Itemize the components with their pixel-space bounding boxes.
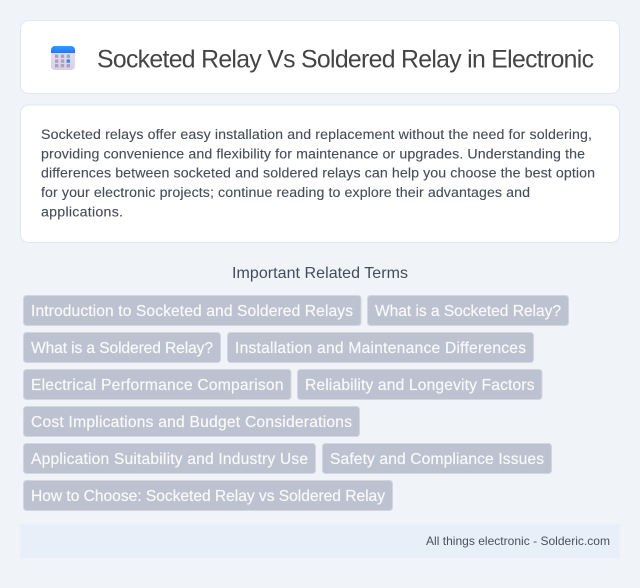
text block: introduction paragraph: Socketed relays offer easy installation and replacement without the need for soldering,: [41, 127, 592, 143]
panel: title card: [20, 20, 620, 94]
text block: introduction paragraph: differences between socketed and soldered relays can help you choose the best option: [41, 166, 595, 182]
chip: what is a soldered relay: [24, 332, 220, 362]
icon: calendar: [51, 46, 75, 70]
text block: introduction paragraph: applications.: [41, 204, 123, 220]
chip: electrical performance: [24, 370, 291, 400]
chip: reliability and longevity: [298, 370, 542, 400]
heading: important related terms: Important Related Terms: [232, 265, 408, 282]
chip: application suitability: Application Suitability and Industry Use: [31, 451, 308, 468]
panel: related terms chips: [24, 296, 568, 510]
chip: how to choose: [24, 480, 392, 510]
chip: cost implications: [24, 406, 360, 436]
text block: introduction paragraph: for your electronic projects; continue reading to explore their advantages and: [41, 185, 530, 201]
footer text: All things electronic - Solderic.com: [426, 534, 610, 548]
chip: introduction: Introduction to Socketed and Soldered Relays: [31, 303, 353, 320]
chip: what is a socketed relay: [368, 296, 568, 326]
text block: introduction paragraph: providing convenience and flexibility for maintenance or upgrades. Understanding the: [41, 146, 585, 162]
chip: what is a soldered relay: What is a Soldered Relay?: [31, 340, 213, 357]
chip: how to choose: How to Choose: Socketed Relay vs Soldered Relay: [31, 488, 385, 505]
panel: introduction card: [20, 105, 620, 242]
chip: application suitability: [24, 444, 316, 474]
text block: introduction paragraph: [41, 127, 595, 220]
footer bar: [20, 524, 620, 558]
chip: safety and compliance: [322, 444, 552, 474]
title: Socketed Relay Vs Soldered Relay in Electronic: [97, 46, 594, 74]
chip: reliability and longevity: Reliability and Longevity Factors: [305, 377, 535, 394]
chip: what is a socketed relay: What is a Socketed Relay?: [375, 303, 561, 320]
chip: safety and compliance: Safety and Compliance Issues: [330, 451, 544, 468]
chip: cost implications: Cost Implications and Budget Considerations: [31, 414, 352, 431]
chip: installation and maintenance: Installation and Maintenance Differences: [235, 340, 526, 357]
chip: installation and maintenance: [228, 332, 534, 362]
chip: electrical performance: Electrical Performance Comparison: [31, 377, 284, 394]
chip: introduction: [24, 296, 361, 326]
